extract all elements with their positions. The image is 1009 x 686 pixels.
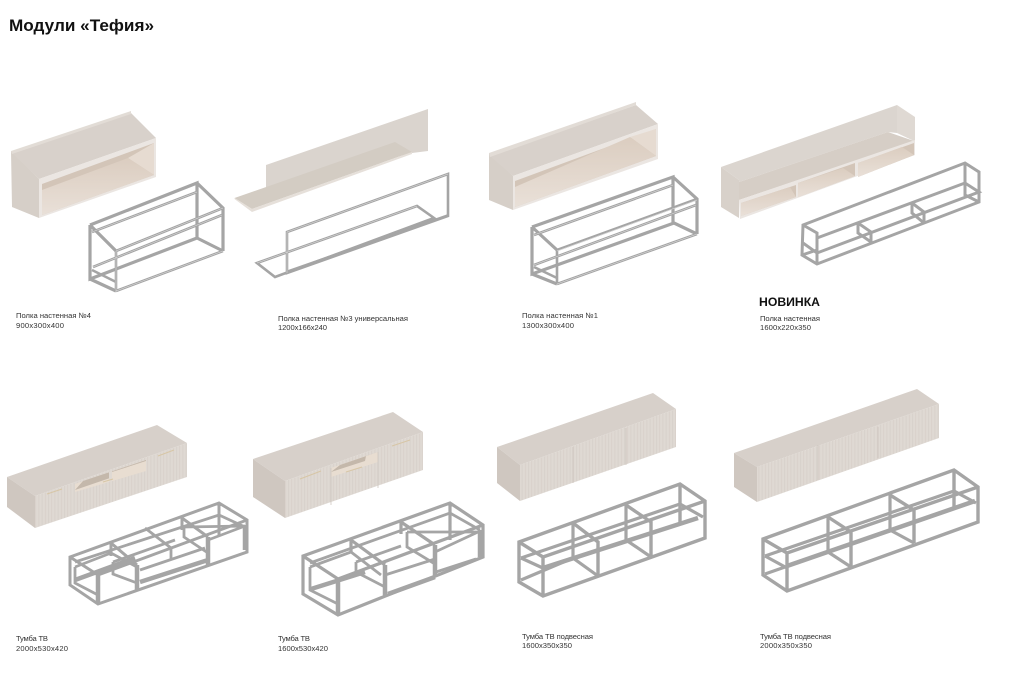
module: new wall shelf: [721, 105, 979, 332]
label: shelf No1: Полка настенная №1: [522, 311, 598, 320]
cabinet render: hanging TV stand 1600: [497, 393, 676, 501]
cabinet render: TV stand 1600: [253, 412, 423, 518]
wire frame: TV stand 1600: [303, 503, 483, 615]
shelf render: shelf No1: [489, 102, 658, 210]
module: hanging TV stand 1600: [497, 393, 705, 650]
module: shelf No3: [234, 109, 448, 332]
label: TV stand 2000: 2000х530х420: [16, 644, 68, 653]
label: hanging TV stand 2000: 2000х350х350: [760, 641, 812, 650]
module: TV stand 1600: [253, 412, 483, 653]
wire frame: new wall shelf: [802, 163, 979, 264]
wire frame: hanging TV stand 1600: [519, 484, 705, 596]
label: shelf No3: 1200х166х240: [278, 323, 327, 332]
label: hanging TV stand 1600: Тумба ТВ подвесная: [522, 632, 593, 641]
wire frame: hanging TV stand 2000: [763, 470, 978, 591]
wire frame: shelf No4: [90, 183, 223, 291]
cabinet render: TV stand 2000: [7, 425, 187, 528]
wire frame: shelf No3: [257, 174, 448, 277]
label: shelf No1: 1300х300х400: [522, 321, 574, 330]
shelf render: shelf No3: [234, 109, 428, 212]
label: hanging TV stand 2000: Тумба ТВ подвесная: [760, 632, 831, 641]
title: Модули «Тефия»: [9, 16, 154, 35]
wire frame: TV stand 2000: [70, 503, 247, 604]
label: TV stand 1600: Тумба ТВ: [278, 634, 310, 643]
shelf render: new wall shelf: [721, 105, 915, 219]
module: shelf No1: [489, 102, 697, 330]
module: shelf No4: [11, 111, 223, 330]
shelf render: shelf No4: [11, 111, 156, 218]
cabinet render: hanging TV stand 2000: [734, 389, 939, 502]
module: hanging TV stand 2000: [734, 389, 978, 650]
module: TV stand 2000: [7, 425, 247, 653]
wire frame: shelf No1: [532, 177, 697, 284]
label: TV stand 2000: Тумба ТВ: [16, 634, 48, 643]
label: shelf No3: Полка настенная №3 универсальная: [278, 314, 408, 323]
label: shelf No4: 900х300х400: [16, 321, 64, 330]
label: hanging TV stand 1600: 1600х350х350: [522, 641, 572, 650]
label: new wall shelf: 1600х220х350: [760, 323, 811, 332]
label: TV stand 1600: 1600х530х420: [278, 644, 328, 653]
label: new wall shelf: Полка настенная: [760, 314, 820, 323]
label: shelf No4: Полка настенная №4: [16, 311, 91, 320]
badge: new: НОВИНКА: [759, 297, 820, 309]
